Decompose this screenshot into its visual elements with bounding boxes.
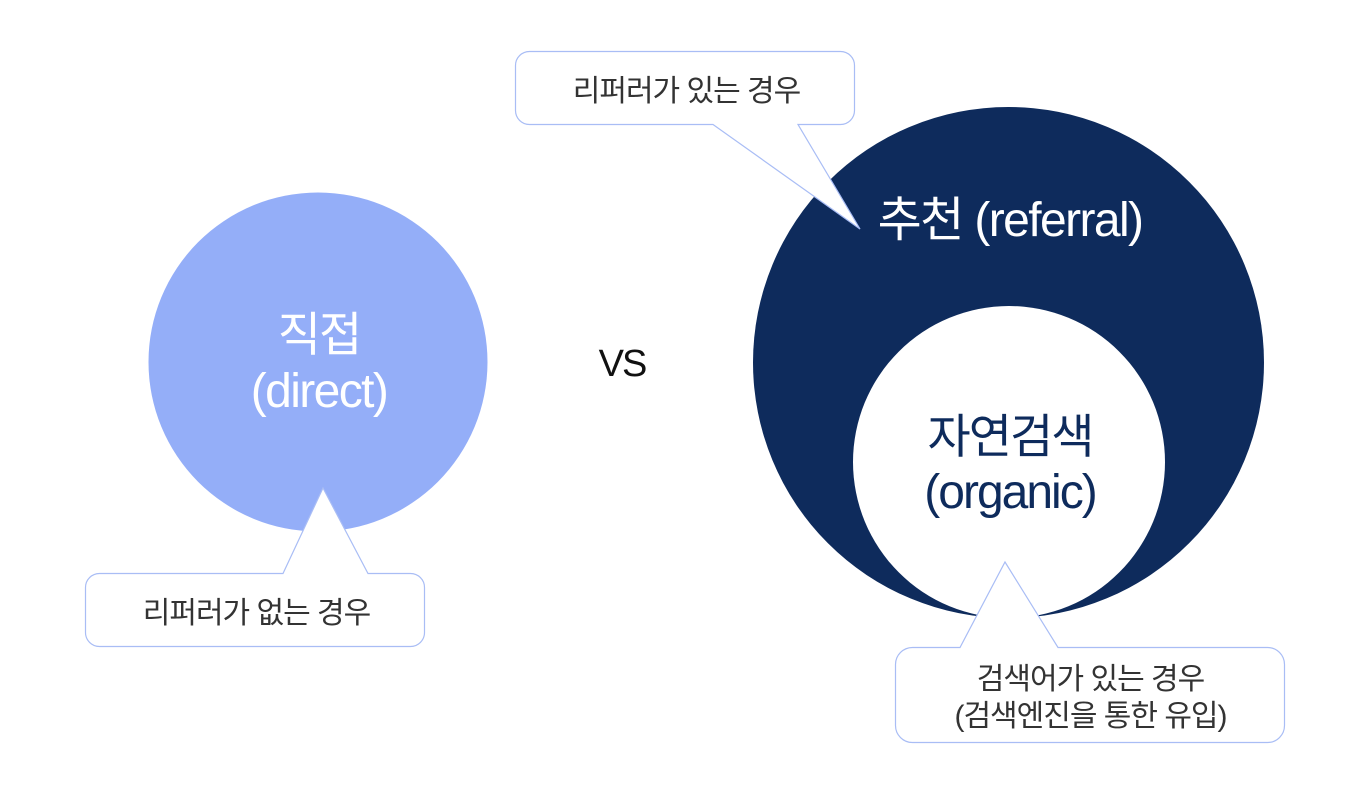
circle: referral [753,107,1264,618]
circle: direct [148,192,488,532]
callout: with referrer [516,52,860,229]
circle: organic [853,306,1165,618]
callout: with referrer: 리퍼러가 있는 경우 [573,75,801,108]
circle: direct: 직접 [278,308,360,361]
callout: without referrer [86,488,424,646]
circle: referral: 추천 (referral) [878,194,1142,247]
callout: without referrer: 리퍼러가 없는 경우 [143,597,371,630]
circle: organic: (organic) [924,466,1096,519]
callout: with search term [896,562,1284,742]
callout: with search term: (검색엔진을 통한 유입) [954,700,1227,733]
circle: organic: 자연검색 [928,410,1092,463]
callout: with search term: 검색어가 있는 경우 [977,663,1205,696]
label: VS: VS [599,343,646,385]
circle: direct: (direct) [251,365,387,418]
